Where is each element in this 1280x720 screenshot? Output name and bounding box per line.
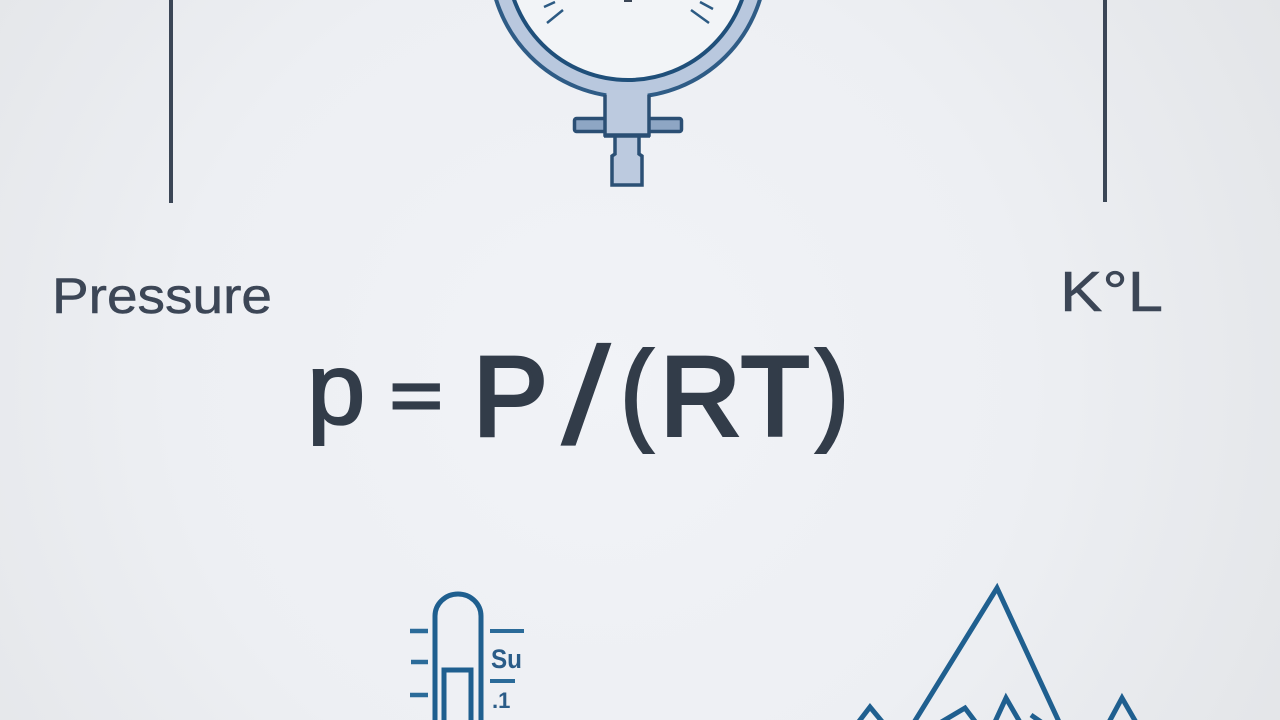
formula: T [741,334,809,459]
label: pressure: Pressure [52,268,272,324]
formula: ( [621,330,652,453]
icon: thermometer [410,594,524,720]
formula: = [390,356,443,436]
formula [307,318,848,474]
formula: p [307,331,365,446]
thermometer scale text: Su [491,644,522,674]
left divider line [169,0,173,203]
thermometer scale number: .1 [492,688,510,713]
formula: ) [817,330,848,453]
right divider line [1103,0,1107,202]
icon: mountains [857,588,1137,720]
label: units: K°L [1060,260,1163,324]
formula: / [561,318,611,474]
icon: pressure gauge [490,0,766,185]
formula: P [473,334,548,459]
formula: R [660,334,741,459]
